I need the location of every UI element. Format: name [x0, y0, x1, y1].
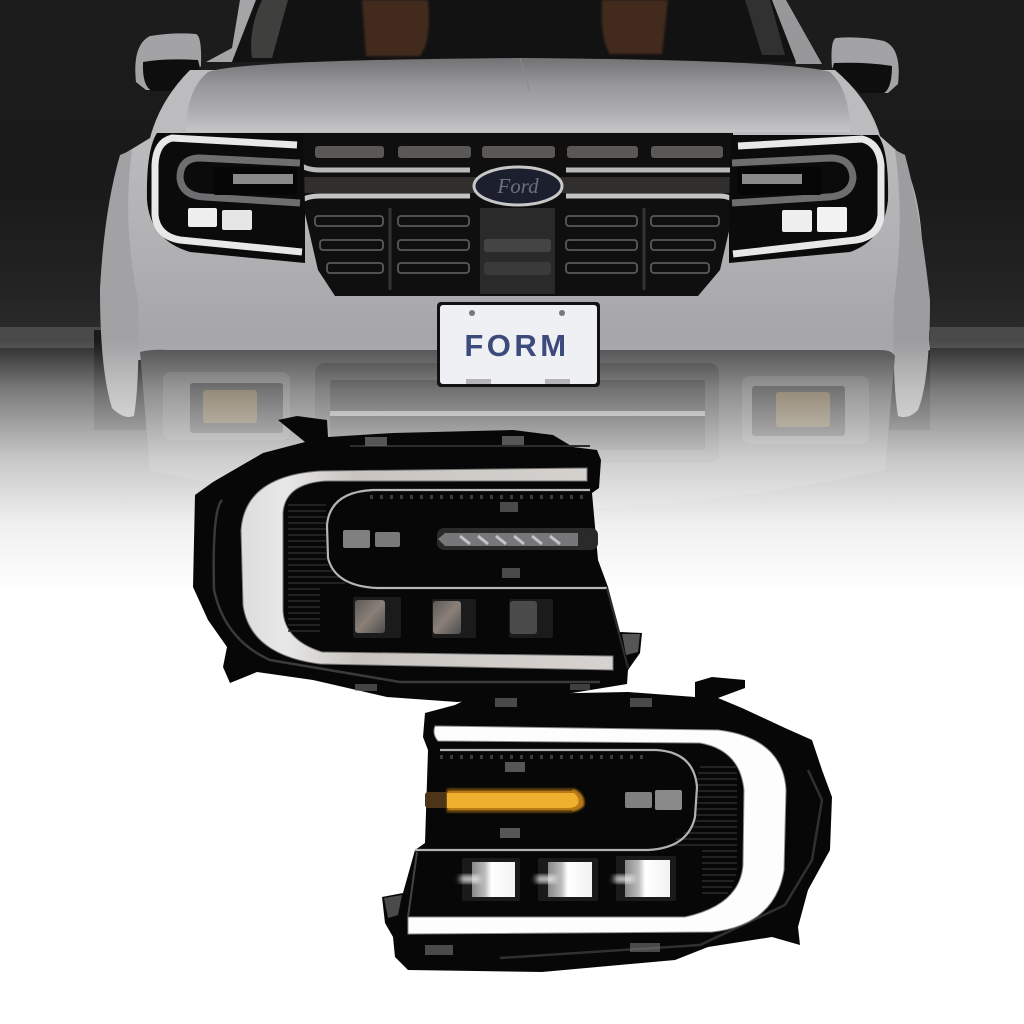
- headlight on car, right: [729, 135, 888, 263]
- small auxiliary lamps: [343, 530, 400, 548]
- chrome inner outline: [327, 490, 607, 588]
- chrome inner outline: [415, 750, 697, 850]
- headlight unit: upper left: [193, 416, 642, 702]
- icon: side mirrors: [135, 33, 899, 93]
- fade overlay: car dissolves into white: [0, 340, 1024, 602]
- clips on housing: [355, 436, 640, 691]
- background: dark studio to white: [0, 0, 1024, 600]
- license plate: FORM: [437, 302, 600, 387]
- headlight unit: lower right: [382, 677, 832, 972]
- ribbed panel: [672, 767, 737, 893]
- wheels dark behind body: [94, 330, 930, 430]
- lower bumper with fog lamps: [140, 350, 895, 510]
- LED projector lights on: [460, 856, 676, 901]
- clear turn signal: [437, 528, 598, 550]
- headlight on car, left: [147, 133, 305, 263]
- ribbed panel: [288, 505, 345, 631]
- small auxiliary lamps: [625, 790, 682, 810]
- grille: [180, 133, 835, 296]
- license plate: FORM: FORM: [464, 328, 570, 363]
- icon: Ford oval badge: Ford: [496, 174, 539, 198]
- icon: Ford oval badge: [474, 167, 562, 205]
- DRL light bar: [241, 468, 613, 670]
- DRL light bar: [408, 726, 786, 934]
- hood: [186, 58, 850, 132]
- LED strip dots: [440, 755, 650, 759]
- car body: [100, 70, 930, 360]
- windshield and cabin: [206, 0, 822, 64]
- projector lenses: [353, 597, 553, 638]
- turn signal: amber: [425, 789, 584, 812]
- LED strip dots: [370, 495, 585, 499]
- fender flares: [100, 150, 930, 417]
- car: front view of grey SUV: [94, 0, 930, 510]
- clips on housing: [384, 698, 660, 955]
